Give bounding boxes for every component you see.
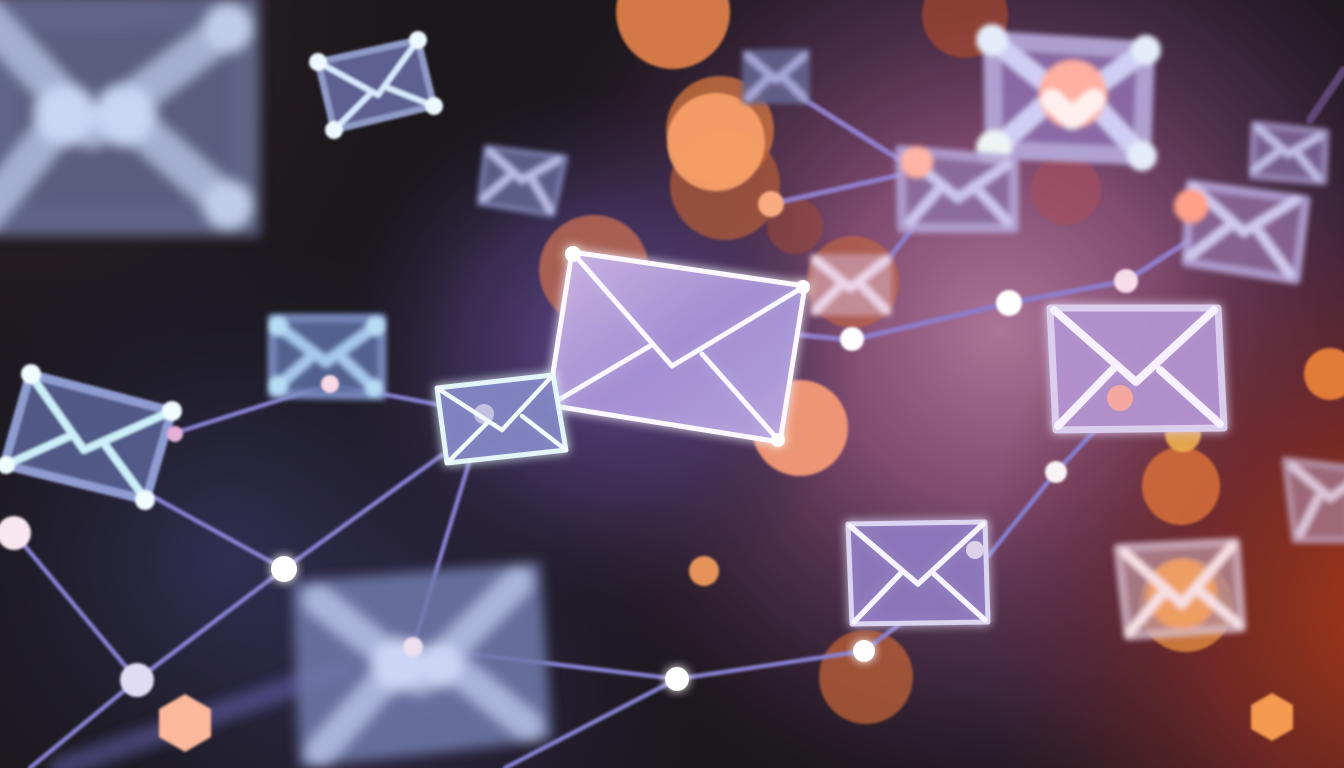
envelope: far right upper: [1174, 184, 1306, 280]
envelope: small in front of main: [437, 375, 566, 463]
envelope: left tilted bright: [0, 364, 183, 510]
envelope: top right large: [976, 24, 1161, 171]
network nodes: [0, 191, 1138, 697]
envelope: small center right pink: [810, 254, 892, 316]
envelope: far right top: [1252, 124, 1326, 182]
envelope: upper center small: [479, 147, 566, 215]
hexagon: lower left: [159, 694, 211, 752]
envelope: large blurred bottom: [292, 562, 552, 768]
envelope: far right edge: [1285, 460, 1344, 540]
envelope: lower right with orange glow: [1118, 542, 1242, 636]
envelope: main large glowing: [544, 246, 810, 447]
envelope: large blurred top left: [0, 0, 260, 236]
envelope: right large bright: [1050, 308, 1224, 430]
envelope: top center dim: [742, 48, 810, 104]
envelope: right of center top: [900, 146, 1014, 228]
hexagon: lower right: [1251, 693, 1293, 741]
envelope: left center dim: [268, 316, 386, 397]
envelope: top small tilted: [309, 31, 443, 139]
bokeh: orange lights behind envelopes: [539, 0, 1344, 724]
envelope: lower right bright: [848, 522, 988, 624]
node on left center envelope: [321, 375, 339, 393]
